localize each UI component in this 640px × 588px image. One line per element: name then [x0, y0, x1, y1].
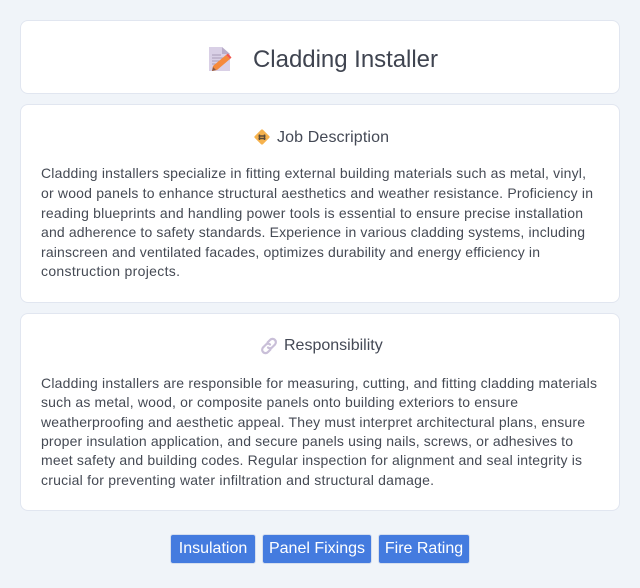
responsibility text: Cladding installers are responsible for measuring, cutting, and fitting cladding materials [41, 375, 597, 391]
job description text: reading blueprints and handling power tools is essential to ensure precise installation [41, 205, 583, 221]
tag: fire rating [378, 534, 470, 564]
responsibility text: proper insulation application, and secure panels using nails, screws, or adhesives to [41, 433, 573, 449]
heading: responsibility: Responsibility [284, 337, 383, 354]
panel: title card [20, 20, 620, 94]
panel: responsibility [20, 313, 620, 511]
icon: document with pencil [209, 47, 232, 71]
tag: fire rating: Fire Rating [385, 540, 463, 557]
responsibility text: weatherproofing and aesthetic appeal. They must interpret architectural plans, ensure [40, 414, 585, 430]
tag: insulation: Insulation [179, 540, 247, 557]
responsibility text: such as metal, wood, or composite panels onto building exteriors to ensure [41, 394, 518, 410]
tag: panel fixings [262, 534, 372, 564]
icon: chain link [261, 338, 277, 354]
heading: job description: Job Description [277, 129, 389, 146]
job description text: and adherence to safety standards. Experience in various cladding systems, including [41, 224, 585, 240]
responsibility text [40, 375, 597, 488]
responsibility text: crucial for preventing water infiltration and structural damage. [41, 472, 434, 488]
panel: job description [20, 104, 620, 303]
job description text: Cladding installers specialize in fitting external building materials such as metal, vinyl, [41, 165, 586, 181]
job description text: construction projects. [41, 263, 180, 279]
job description text [41, 165, 593, 279]
responsibility text: meet safety and building codes. Regular inspection for alignment and seal integrity is [41, 452, 582, 468]
tag: insulation [170, 534, 256, 564]
icon: construction sign [254, 129, 270, 145]
tag: panel fixings: Panel Fixings [269, 540, 365, 557]
job description text: rainscreen and ventilated facades, optimizes durability and energy efficiency in [41, 244, 540, 260]
job description text: or wood panels to enhance structural aesthetics and weather resistance. Proficiency in [41, 185, 593, 201]
title: Cladding Installer [253, 46, 438, 73]
